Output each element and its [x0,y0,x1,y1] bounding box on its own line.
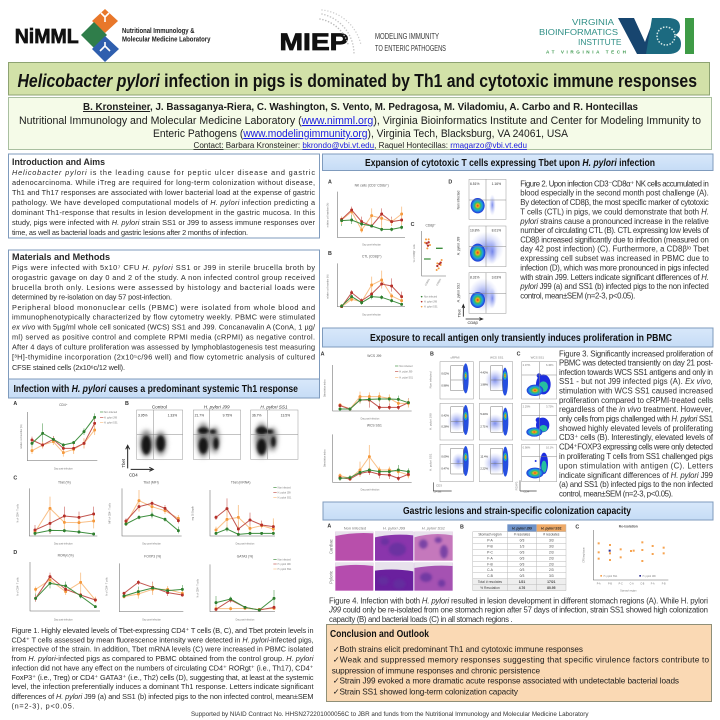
panel B: re-isolation table: 0/3 [520,556,524,560]
panel: conclusion and outlook: ✓Both strains elicit predominant Th1 and cytotoxic immune responses [333,645,583,654]
panel B: re-isolation table: % Resolation [480,586,500,590]
figure 1 caption: infection did not have any effect on the numbers of circulating CD4⁺ RORgt⁺ (i.e., Th17), CD4⁺ [12,664,314,672]
figure 2 caption: with strain J99. Letters indicate significant differences of H. [519,273,709,282]
figure 3 caption: stimulation with WCS SS1 caused increased [559,386,713,396]
chart A: WCS J99 stimulation index: H. pylori SS1 [399,376,414,379]
panel: conclusion and outlook: ✓Strain SS1 showed long-term colonization capacity [333,688,519,696]
logo: VBI: AT VIRGINIA TECH [546,50,627,54]
panel B: re-isolation table: 1/21 [519,580,525,584]
panel B: re-isolation table: F-B [487,562,493,566]
panel B: re-isolation table: B [460,525,464,531]
chart A: WCS J99 stimulation index: WCS J99 [367,354,382,358]
panel A: histology images: Pyloric [328,570,333,584]
panel: conclusion and outlook: Conclusion and Outlook [330,629,429,640]
chart A: CD4: relative cell number (%) [20,424,23,449]
chart D: RORt: RORγt (%) [58,554,74,558]
chart C: CD8 low scatter: C [411,222,415,228]
chart C: Tbet mRNA: H. pylori SS1 [278,497,292,500]
chart C: Tbet percent [13,475,97,545]
flow plots B: CFSE vs CD3: 1.98% [480,383,489,387]
figure 3 caption: in proliferating T cells from SS1 challenged pigs [559,452,713,461]
panel: introduction and aims: time, as well as bacterial loads and gastric lesions after 2 months of infection. [12,228,248,237]
panel: conclusion and outlook: suppression of immune responses and chronic persistence [332,666,540,676]
panel A: histology images: H. pylori J99 [383,526,406,531]
figure 3 caption: PBMC was detected transiently on day 21 post- [559,358,713,368]
logo: MIEP: TO ENTERIC PATHOGENS [375,44,446,53]
panel: materials and methods: After 4 days of culture proliferation was assessed by lymphoblastogenesis test measuring [12,342,315,352]
chart D: Tbet vs CD8 flow plots: Non infected [456,191,460,209]
flow plots B: CFSE vs CD3: 0.98% [441,384,450,388]
panel C: re-isolation scatter: P-C [619,584,623,586]
flow plots B: CFSE vs CD3: 0.02% [441,371,450,375]
chart D: GATA3: GATA3 (%) [237,555,253,559]
flow plots C: FOXP3 vs CD4: 0.98% [523,446,531,450]
chart D: Tbet vs CD8 flow plots: D [448,179,452,185]
chart B: Tbet vs CD4 dot plots: 3.95% [138,414,147,418]
figure 2 caption [519,180,710,300]
figure 2 caption: blood especially in the second month post challenge (A). [520,188,709,198]
figure 3 caption: infection towards WCS SS1 antigens and only in [559,368,713,377]
authors and affiliations: Enteric Pathogens (www.modelingimmunity.org), Virginia Tech, Blacksburg, VA 24061, USA [153,128,569,140]
figure 1 caption: (n=2-3), p<0.05. [12,702,74,710]
heading: recall antigen [322,328,713,347]
figure 2 caption: By detection of CD8β, the most specific marker of cytotoxic [520,198,709,207]
heading: gastric lesions [323,502,713,520]
flow plots B: CFSE vs CD3: 0.09% [441,454,450,458]
panel: introduction and aims: Introduction and Aims [12,156,105,167]
footer: funding acknowledgement: Supported by NIAID Contract No. HHSN272201000056C to JBR and funds from the Nutritional Immunology and Molecular Medicine Laboratory [191,711,589,718]
panel B: re-isolation table: 0/3 [520,551,524,555]
flow plots B: CFSE vs CD3: 0.47% [441,466,450,470]
figure 1 caption: level, the infection preferentially induces a dominant Th1 response. Letters indicate significant [12,682,314,691]
chart D: GATA3: Day post-infection [236,619,255,622]
figure 3 caption: upon stimulation with antigen (C). Letters [559,462,713,470]
chart C: Tbet MFI: MFI of CD4⁺ T cells [108,502,112,524]
figure 2 caption: number of circulating CTL (B). CTL expressing low levels of [520,226,710,235]
chart A: WCS SS1 stimulation index: WCS SS1 [367,423,382,427]
flow plots B: CFSE vs CD3: 0.28% [441,425,450,429]
panel B: re-isolation table: 2/3 [549,568,554,572]
figure 1 caption: from H. pylori-infected pigs as compared to PBMC obtained from the control group. H. pylori [12,654,314,663]
panel: conclusion and outlook: ✓Strain J99 evoked a more dramatic acute response associated with undetectable bacterial loads [333,676,679,686]
chart B: Tbet vs CD4 dot plots [121,401,298,478]
heading: infection section: Infection with H. pylori causes a predominant systemic Th1 response [14,384,298,395]
figure 1 caption: FoxP3⁺ (i.e., Treg) or CD4⁺ GATA3⁺ (i.e., Th2) cells (D), suggesting that, at least at the systemic [12,673,314,682]
chart A: NK cells: Day post-infection [362,244,382,247]
figure 3 caption: SS1 - but not J99 infected pigs (A). Ex vivo, [559,377,713,386]
flow plots C: FOXP3 vs CD4: CD4 [523,490,530,494]
figure 3 caption: proliferation compared to cRPMI-treated cells [559,396,713,405]
panel B: re-isolation table: Total # resolates [478,580,502,584]
chart C: Tbet mRNA: Tbet (mRNA) [231,480,250,484]
chart B: Tbet vs CD4 dot plots: 9.75% [223,414,232,418]
figure 3 caption: only cells from pigs challenged with H. pylori SS1 [559,414,713,424]
chart D: FOXP3: % of CD4⁺ T cells [104,577,108,596]
figure 2 caption: day 42 post infection) (C). Furthermore, a CD8βˡᵒ Tbet [520,244,710,254]
chart A: NK cells [327,179,405,247]
panel: introduction and aims: study, pigs were infected with H. pylori strain SS1 or J99 to assess immune responses over [12,218,316,227]
panel: materials and methods: ex vivo with 5µg/ml whole cell sonicated (WCS) SS1 and J99. Concanavalin A (ConA, 1 µg/ [12,322,316,332]
figure 3 caption: control, mean±SEM (n=2-3, p<0.05). [559,490,673,498]
figure 3 caption: indicate significant differences of H. pylori J99 [559,471,713,480]
panel B: re-isolation table: 17/21 [547,580,556,584]
chart D: Tbet vs CD8 flow plots [448,179,506,325]
panel A: histology images: Cardiac [328,538,333,554]
figure 2 caption: pylori J99 (a) and SS1 (b) infected pigs to the non infected [519,282,709,291]
panel C: re-isolation scatter: C-B [640,584,645,586]
chart C: Tbet percent: % of CD4⁺ T cells [16,503,20,523]
chart B: Tbet vs CD4 dot plots: H. pylori J99 [204,405,230,410]
chart A: WCS J99 stimulation index [321,352,414,420]
panel: materials and methods: ml) served as positive control and complete RPMI media (cRPMI) as negative control. [12,332,315,342]
heading: expansion of cytotoxic T cells: Expansion of cytotoxic T cells expressing Tbet upon H. pylori infection [365,158,655,169]
chart A: CD4: Day post-infection [54,467,73,470]
chart B: Tbet vs CD4 dot plots: 36.7% [252,414,261,418]
panel: materials and methods: brucella broth only. Lesions were assessed by histology and bacterial loads were [12,283,315,292]
chart C: CD8 low scatter: % of CD8β⁺ cells [412,244,416,262]
chart C: Tbet MFI: Tbet (MFI) [143,480,159,484]
chart C: CD8 low scatter: Non infected [424,296,438,299]
panel C: re-isolation scatter: C-A [630,583,634,586]
logo: VBI: VIRGINIA [572,18,615,27]
figure 2 caption: expressing cell subset was increased in PBMC due to [520,254,709,263]
figure 3 caption: CD4⁺FOXP3 expressing cells were only detected [559,442,713,452]
chart D: Tbet vs CD8 flow plots: Tbet [457,308,462,317]
chart D: GATA3 [195,555,292,622]
chart B: CTL: B [328,251,332,257]
figure 3: proliferation charts [321,352,557,494]
flow plots C: FOXP3 vs CD4: 10.1% [546,446,554,450]
panel B: re-isolation table: 80.95 [547,586,556,590]
chart A: NK cells: NK cells (CD3⁻CD8α⁺) [355,184,389,188]
flow plots C: FOXP3 vs CD4: C [517,352,521,358]
panel: materials and methods [8,250,320,379]
chart D: RORt: D [13,550,17,556]
figure 4: lesions and colonization [327,523,668,593]
figure 1 caption [12,626,314,710]
panel C: re-isolation scatter: C [575,525,579,531]
chart D: Tbet vs CD8 flow plots: 1.16% [492,182,501,186]
panel: conclusion and outlook: ✓Weak and suppressed memory responses suggesting that specific virulence factors contribute to [333,656,709,664]
chart C: CD8 low scatter [411,222,446,309]
chart A: WCS J99 stimulation index: Non infected [399,365,413,368]
flow plots B: CFSE vs CD3: H. pylori J99 [429,413,433,430]
chart B: Tbet vs CD4 dot plots: Control [152,405,167,410]
logo: VBI: INSTITUTE [578,38,622,47]
flow plots B: CFSE vs CD3: 5.44% [480,412,489,416]
panel B: re-isolation table: # resolates [543,533,560,537]
chart B: Tbet vs CD4 dot plots: B [125,401,129,407]
authors and affiliations [8,98,712,150]
authors and affiliations: Contact: Barbara Kronsteiner: bkrondo@vbi.vt.edu, Raquel Hontecillas: rmagarzo@vbi.vt.edu [194,141,527,150]
logo: NIMML [15,9,211,62]
figure 1 caption: CD4⁺ T cells assessed by mean fluorescence intensity were detected in H. pylori-infected pigs, [12,636,314,644]
panel C: re-isolation scatter: P-A [597,583,601,586]
chart A: WCS J99 stimulation index: Stimulation index [324,379,327,397]
flow plots B: CFSE vs CD3: 2.71% [480,425,489,429]
panel: introduction and aims: dominant Th1-response that results in lesion development in the gastric mucosa. In this [12,208,315,217]
authors and affiliations: B. Kronsteiner, J. Bassaganya-Riera, C. Washington, S. Vento, M. Pedragosa, M. Viladomiu, A. Carbo and R. Hontecillas [83,102,638,113]
chart B: CTL: relative cell number (%) [327,274,330,299]
chart A: CD4: H. pylori J99 [104,416,118,419]
chart B: Tbet vs CD4 dot plots: Tbet [121,458,126,468]
figure 1 caption: Figure 1. Highly elevated levels of Tbet-expressing CD4⁺ T cells (B, C), and Tbet protein levels in [12,626,314,635]
panel: materials and methods: immunophenotypically characterized by flow cytometry weekly. PBMC were stimulated [12,312,315,322]
chart C: Tbet percent: Tbet (%) [58,480,71,484]
figure 3 caption: CD3⁺ cells (B). Interestingly, elevated levels of [559,433,714,442]
chart B: CTL [327,251,405,317]
chart D: Tbet vs CD8 flow plots: CD8β [468,320,479,325]
chart D: Tbet vs CD8 flow plots: H. pylori J99 [456,237,460,255]
figure 2 caption: T cells (CTL) in pigs, we could demonstrate that both H. [520,208,709,216]
chart D: RORt: Day post-infection [54,619,73,622]
panel B: re-isolation table: P-A [487,539,494,543]
panel: materials and methods: CFSE stained cells (2x10⁶c/12 well). [12,363,125,372]
chart B: Tbet vs CD4 dot plots: H. pylori SS1 [260,405,288,410]
chart D: FOXP3: FOXP3 (%) [144,555,161,559]
heading: expansion of cytotoxic T cells [322,154,713,170]
figure 4 caption: Figure 4. Infection with both H. pylori resulted in lesion development in different stomach regions (A). While H. pylori [329,596,708,606]
flow plots B: CFSE vs CD3: 2.22% [480,466,489,470]
logo: NIMML: NiMML [15,26,79,48]
title banner [8,62,710,95]
chart D: Tbet vs CD8 flow plots: 10.8% [470,229,479,233]
panel A: histology images [327,523,453,591]
flow plots C: FOXP3 vs CD4: WCS SS1 [531,356,544,360]
chart C: CD8 low scatter: CD8β⁺ [425,223,436,227]
panel C: re-isolation scatter: Stomach region [620,590,637,593]
panel: introduction and aims: Helicobacter pylori is the leading cause for peptic ulcer disease and gastric [12,168,315,177]
chart C: Tbet mRNA: avg Ct/Gapdh [191,505,194,521]
panel C: re-isolation scatter: P-B [608,584,612,586]
flow plots C: FOXP3 vs CD4: 2.07% [523,363,531,367]
chart D: GATA3: H. pylori SS1 [278,568,292,571]
flow plots C: FOXP3 vs CD4: FOXP3 [514,481,518,490]
logo: MIEP [280,10,446,56]
chart C: CD8 low scatter: CD8βlo [425,278,431,286]
chart C: CD8 low scatter: H. pylori SS1 [424,306,438,309]
chart B: CTL: Day post-infection [362,314,382,317]
chart D: Tbet vs CD8 flow plots: H. pylori SS1 [456,283,460,302]
flow plots B: CFSE vs CD3 [429,352,513,494]
figure 2 caption: Figure 2. Upon infection CD3⁻CD8α⁺ NK cells accumulated in [520,180,709,188]
panel B: re-isolation table: 3/3 [549,539,554,543]
panel A: histology images: A [327,523,331,529]
chart A: WCS J99 stimulation index: A [321,352,325,358]
chart A: CD4: A [13,401,17,407]
panel B: re-isolation table: P-C [487,551,493,555]
figure 1 caption: irrespective of the strain. In addition, Tbet mRNA levels (C) were increased in PBMC isolated [12,644,314,654]
chart A: WCS SS1 stimulation index: Stimulation index [324,449,327,467]
panel: introduction and aims: pathology. We have developed computational models of H. pylori infection predicting a [12,198,316,207]
panel C: re-isolation scatter: H. pylori SS1 [604,575,618,578]
chart B: Tbet vs CD4 dot plots: CD4 [129,473,138,478]
flow plots B: CFSE vs CD3: 4.42% [480,370,489,374]
figure 3 caption: regardless of the in vivo treatment. However, [559,405,713,414]
heading: gastric lesions: Gastric lesions and strain-specific colonization capacity [403,506,631,517]
authors and affiliations: Nutritional Immunology and Molecular Medicine Laboratory (www.nimml.org), Virginia Bioinformatics Institute and Center for Modeling Immunity to [19,115,701,127]
panel B: re-isolation table: 3/3 [549,574,554,578]
panel B: re-isolation table: F-A [487,556,493,560]
panel: introduction and aims: Th1 and Th17 responses are associated with lower bacterial load at the expense of gastric [12,188,315,197]
panel: materials and methods: orogastric gavage on day 0 and 2 of the study. A non infected control group received [12,273,315,282]
chart C: Tbet mRNA: Non infected [278,487,291,490]
panel A: histology images: Non infected [344,526,366,531]
chart C: Tbet percent: C [13,475,17,481]
panel: materials and methods: determined by re-isolation on day 57 post-infection. [12,292,172,302]
flow plots B: CFSE vs CD3: Non infected [429,371,433,388]
chart B: Tbet vs CD4 dot plots: 21.7% [195,414,204,418]
logo: NIMML: Molecular Medicine Laboratory [122,34,211,44]
chart D: GATA3: % of CD4⁺ T cells [195,578,199,598]
flow plots C: FOXP3 vs CD4: 6.46% [546,363,554,367]
flow plots C: FOXP3 vs CD4: 3.72% [546,405,554,409]
panel B: re-isolation table: 0/3 [520,574,524,578]
figure 3 caption: (a) and SS1 (b) infected pigs to the non infected [559,480,713,489]
chart C: CD8 low scatter: H. pylori J99 [424,301,438,304]
panel: materials and methods: Pigs were infected with 5x10⁷ CFU H. pylori SS1 or J99 in sterile brucella broth by [12,263,315,272]
flow plots B: CFSE vs CD3: 0.42% [441,414,450,418]
figure 2: cytotoxic T cell charts [327,179,506,325]
chart D: Tbet vs CD8 flow plots: 3.03% [492,275,501,279]
flow plots B: CFSE vs CD3: cRPMI [451,356,460,360]
chart D: GATA3: H. pylori J99 [278,563,291,566]
chart B: Tbet vs CD4 dot plots: 1.33% [168,414,177,418]
chart C: Tbet mRNA: Day post-infection [236,542,255,545]
panel B: re-isolation table: 2/3 [549,556,554,560]
figure 1 caption: differences of H. pylori J99 (a) and SS1 (b) infected pigs to the non infected control, mean±SEM [12,692,314,701]
chart B: Tbet vs CD4 dot plots: 13.5% [281,414,290,418]
panel: conclusion and outlook [326,624,712,702]
heading: recall antigen: Exposure to recall antigen only transiently induces proliferation in PBMC [370,333,672,344]
figure 3 caption [559,350,714,498]
figure 3 caption: showed highly elevated levels of proliferating [559,424,713,433]
panel A: histology images: H. pylori SS1 [422,526,445,531]
chart A: WCS SS1 stimulation index: Day post-infection [361,489,380,492]
figure 2 caption: control, mean±SEM (n=2-3, p<0.05). [520,292,635,300]
chart D: RORt [13,550,100,622]
panel: introduction and aims: adenocarcinoma. While iTreg are required for long-term colonization without disease, [12,178,315,187]
flow plots C: FOXP3 vs CD4 [514,352,557,494]
chart A: WCS J99 stimulation index: H. pylori J99 [399,371,413,374]
figure 2 caption: pylori strains cause a pronounced increase in the relative [519,217,709,226]
flow plots B: CFSE vs CD3: CD3 [436,484,442,488]
panel C: re-isolation scatter: F-A [651,583,655,586]
panel B: re-isolation table: Stomach region [478,533,502,537]
panel C: re-isolation scatter: CFU/mg tissue [582,547,585,563]
chart A: NK cells: A [328,179,332,185]
panel C: re-isolation scatter: Re-isolation [619,524,638,528]
panel: materials and methods: [³H]-thymidine incorporation (2x10⁵c/96 well) and flow cytometric analysis of cultured [12,352,315,362]
chart A: CD4: H. pylori SS1 [104,421,118,424]
chart C: Tbet MFI: Day post-infection [142,542,162,545]
flow plots B: CFSE vs CD3: B [430,352,434,358]
panel B: re-isolation table: # resolates [514,533,530,537]
panel C: re-isolation scatter: F-B [662,584,666,586]
panel C: re-isolation scatter [575,524,668,593]
chart A: CD4: CD4⁺ [59,403,68,407]
chart A: NK cells: relative cell number (%) [327,203,330,227]
chart C: Tbet mRNA [191,480,292,545]
chart D: RORt: % of CD4⁺ T cells [16,577,20,596]
chart A: WCS J99 stimulation index: Day post-infection [361,417,380,420]
chart A: CD4 [13,401,118,470]
panel B: re-isolation table: 0/3 [520,568,524,572]
chart B: CTL: CTL (CD8β⁺) [362,254,381,258]
panel B: re-isolation table: C-B [487,574,494,578]
chart C: CD8 low scatter: CD8βhi [436,278,442,286]
panel B: re-isolation table: H. pylori J99 [512,526,532,530]
panel B: re-isolation table: P-B [487,545,494,549]
panel C: re-isolation scatter: H. pylori J99 [643,575,656,578]
chart D: Tbet vs CD8 flow plots: 8.01% [492,229,501,233]
logo: MIEP: MIEP [280,29,348,56]
panel: introduction and aims [8,154,320,238]
figure 4 caption: J99 could only be re-isolated from one stomach region after 57 days of infection, strain SS1 showed high colonization [328,606,708,615]
chart C: Tbet percent: Day post-infection [54,542,73,545]
figure 2 caption: infection (D), which was more pronounced in pigs infected [520,264,709,272]
flow plots C: FOXP3 vs CD4: 2.29% [523,405,531,409]
chart D: GATA3: Non infected [278,558,291,561]
figure 2 caption: CD8β increased significantly due to infection (measured on [520,236,709,244]
panel B: re-isolation table: 0/3 [520,562,524,566]
panel B: re-isolation table: 4.76 [519,586,525,590]
panel B: re-isolation table [460,524,566,591]
flow plots B: CFSE vs CD3: 12.4% [480,454,489,458]
figure 4 caption [328,596,708,624]
chart D: Tbet vs CD8 flow plots: 6.51% [470,182,479,186]
panel B: re-isolation table: 0/3 [520,539,524,543]
chart C: Tbet mRNA: H. pylori J99 [278,492,291,495]
panel B: re-isolation table: 2/3 [549,562,554,566]
figure 3 caption: Figure 3. Significantly increased proliferation of [559,350,714,358]
chart A: WCS SS1 stimulation index [324,423,412,492]
flow plots B: CFSE vs CD3: H. pylori SS1 [429,453,433,471]
figure 1: systemic Th1 response charts [13,401,298,622]
chart D: Tbet vs CD8 flow plots: 8.31% [470,275,479,279]
panel: materials and methods: Peripheral blood mononuclear cells (PBMC) were isolated from whole blood and [12,303,315,312]
panel B: re-isolation table: 2/3 [549,551,554,555]
logo: MIEP: MODELING IMMUNITY [375,32,439,41]
logo: VBI: BIOINFORMATICS [539,28,618,37]
logo: VBI [539,18,694,54]
flow plots B: CFSE vs CD3: CFSE [433,490,441,494]
chart D: FOXP3: Day post-infection [142,619,162,622]
panel B: re-isolation table: 3/3 [549,545,554,549]
figure 4 caption: capacity (B) and bacterial loads (C) in all stomach regions . [329,615,513,624]
panel B: re-isolation table: H. pylori SS1 [541,526,562,530]
chart D: FOXP3 [104,555,183,622]
heading: infection section [8,379,320,398]
logo: NIMML: Nutritional Immunology & [122,26,195,35]
chart C: Tbet MFI [108,480,182,545]
chart A: CD4: Non infected [104,411,118,414]
flow plots B: CFSE vs CD3: WCS SS1 [490,356,504,360]
panel B: re-isolation table: 1/3 [520,545,524,549]
panel: materials and methods: Materials and Methods [12,251,110,262]
panel B: re-isolation table: C-A [487,568,494,572]
